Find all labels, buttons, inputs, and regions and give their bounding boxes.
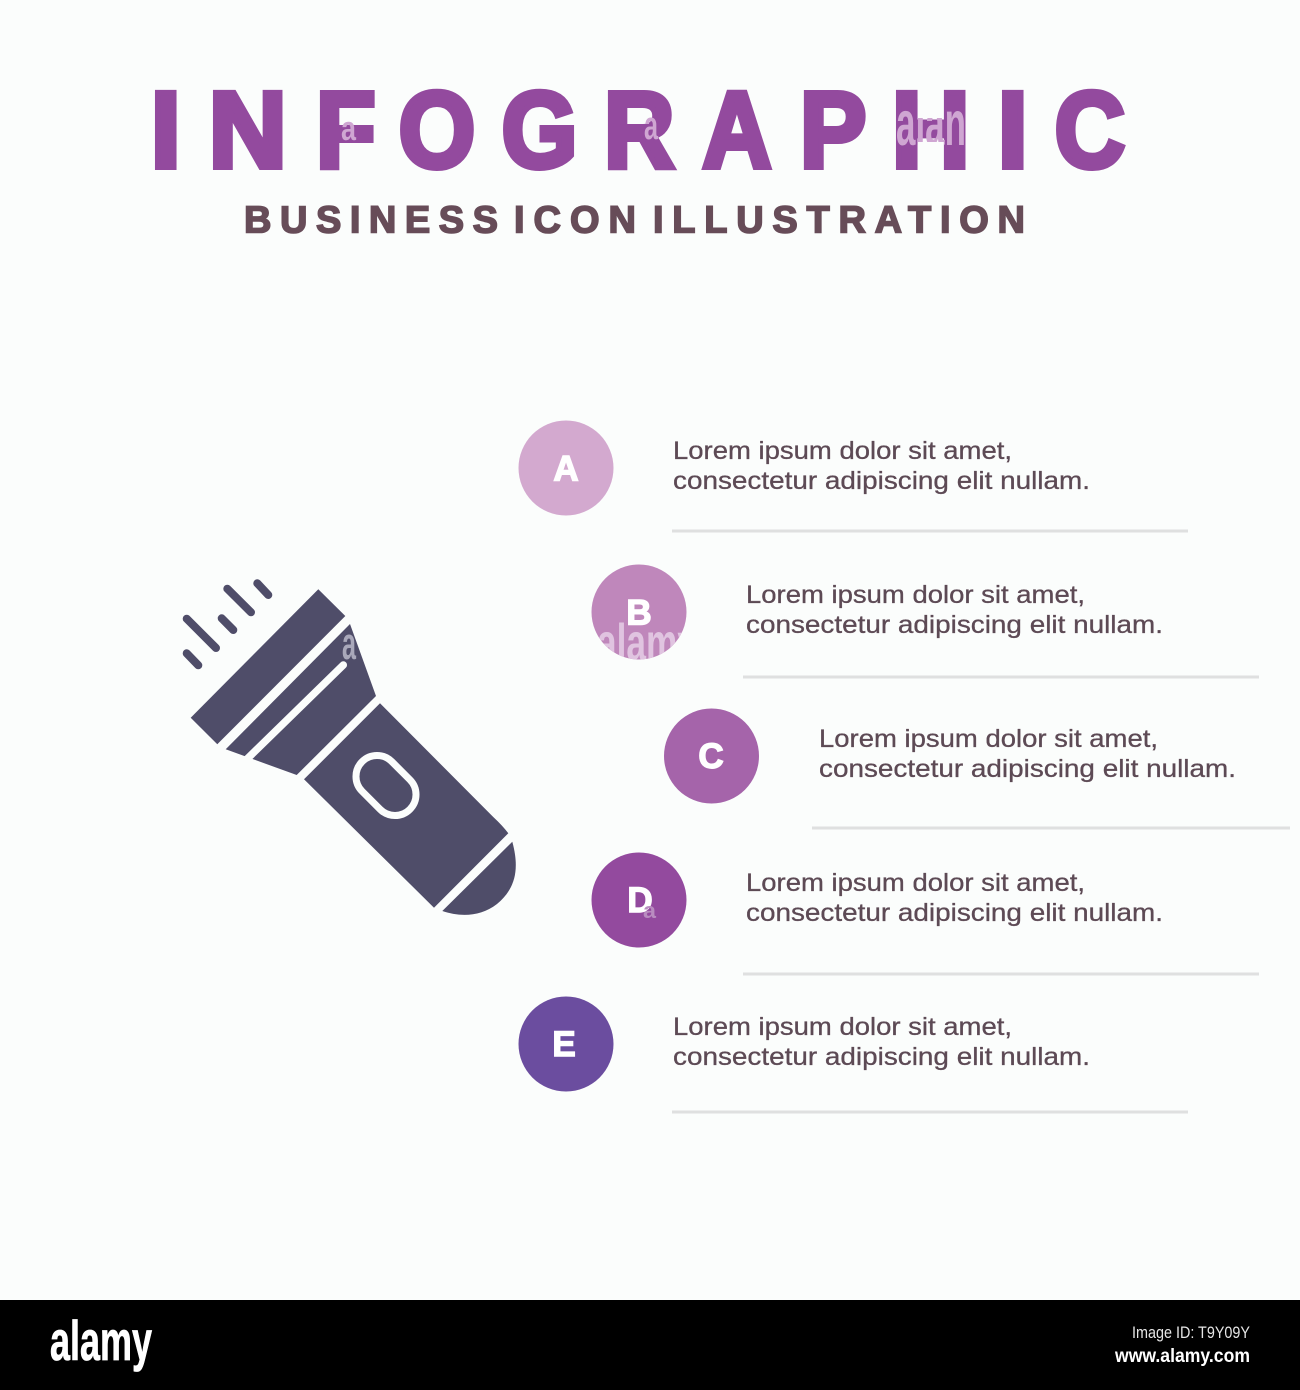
step B	[592, 564, 1259, 677]
badge D	[592, 852, 686, 948]
badge D: a	[643, 898, 657, 923]
text D	[746, 869, 1163, 927]
badge A: A	[553, 450, 579, 488]
footer logo: alamy	[50, 1309, 152, 1372]
text C: consectetur adipiscing elit nullam.	[819, 755, 1236, 783]
text C	[819, 725, 1236, 783]
text B	[746, 581, 1163, 639]
badge B	[592, 564, 686, 660]
title: P	[800, 69, 866, 190]
badge B: B	[626, 594, 652, 632]
text D: consectetur adipiscing elit nullam.	[746, 899, 1163, 927]
title: G	[502, 69, 577, 190]
text A: consectetur adipiscing elit nullam.	[673, 467, 1090, 495]
title: R	[604, 69, 674, 190]
badge E	[518, 996, 614, 1092]
title: H	[892, 69, 970, 190]
text C: Lorem ipsum dolor sit amet,	[819, 725, 1158, 753]
subtitle: ICON	[514, 200, 636, 242]
subtitle	[244, 200, 1025, 242]
text B: Lorem ipsum dolor sit amet,	[746, 581, 1085, 609]
text A	[673, 437, 1090, 495]
title: a	[644, 104, 658, 148]
title: C	[1055, 69, 1125, 190]
title	[154, 88, 1126, 171]
title: I	[151, 69, 181, 190]
step C	[664, 708, 1290, 828]
title: alan	[896, 89, 966, 159]
text D: Lorem ipsum dolor sit amet,	[746, 869, 1085, 897]
badge C	[664, 708, 759, 804]
text B: consectetur adipiscing elit nullam.	[746, 611, 1163, 639]
icon part: light rays	[187, 583, 268, 665]
subtitle: ILLUSTRATION	[653, 200, 1025, 242]
footer url: www.alamy.com	[1114, 1346, 1250, 1367]
badge A	[518, 420, 614, 516]
footer bar	[0, 1300, 1300, 1390]
icon part: flashlight cone	[226, 618, 376, 775]
icon: flashlight	[187, 583, 516, 915]
title: I	[998, 69, 1028, 190]
badge E: E	[552, 1025, 576, 1064]
text A: Lorem ipsum dolor sit amet,	[673, 437, 1012, 465]
footer image id: Image ID: T9Y09Y	[1132, 1323, 1250, 1342]
title: F	[316, 69, 375, 190]
text E	[673, 1013, 1090, 1071]
badge C: C	[698, 737, 724, 776]
subtitle: BUSINESS	[244, 200, 498, 242]
title: N	[209, 69, 287, 190]
badge D: D	[627, 881, 653, 920]
step A	[518, 420, 1188, 531]
step E	[518, 996, 1188, 1112]
icon part: flashlight body	[304, 703, 508, 908]
badge B: alamy	[597, 614, 697, 672]
text E: Lorem ipsum dolor sit amet,	[673, 1013, 1012, 1041]
title: a	[341, 110, 357, 148]
title: A	[703, 69, 771, 190]
icon part: flashlight cone: a	[342, 618, 357, 669]
icon part: flashlight head rim	[191, 589, 345, 744]
step D	[592, 852, 1259, 974]
text E: consectetur adipiscing elit nullam.	[673, 1043, 1090, 1071]
title: O	[399, 70, 475, 190]
icon part: flashlight end cap	[442, 842, 516, 915]
